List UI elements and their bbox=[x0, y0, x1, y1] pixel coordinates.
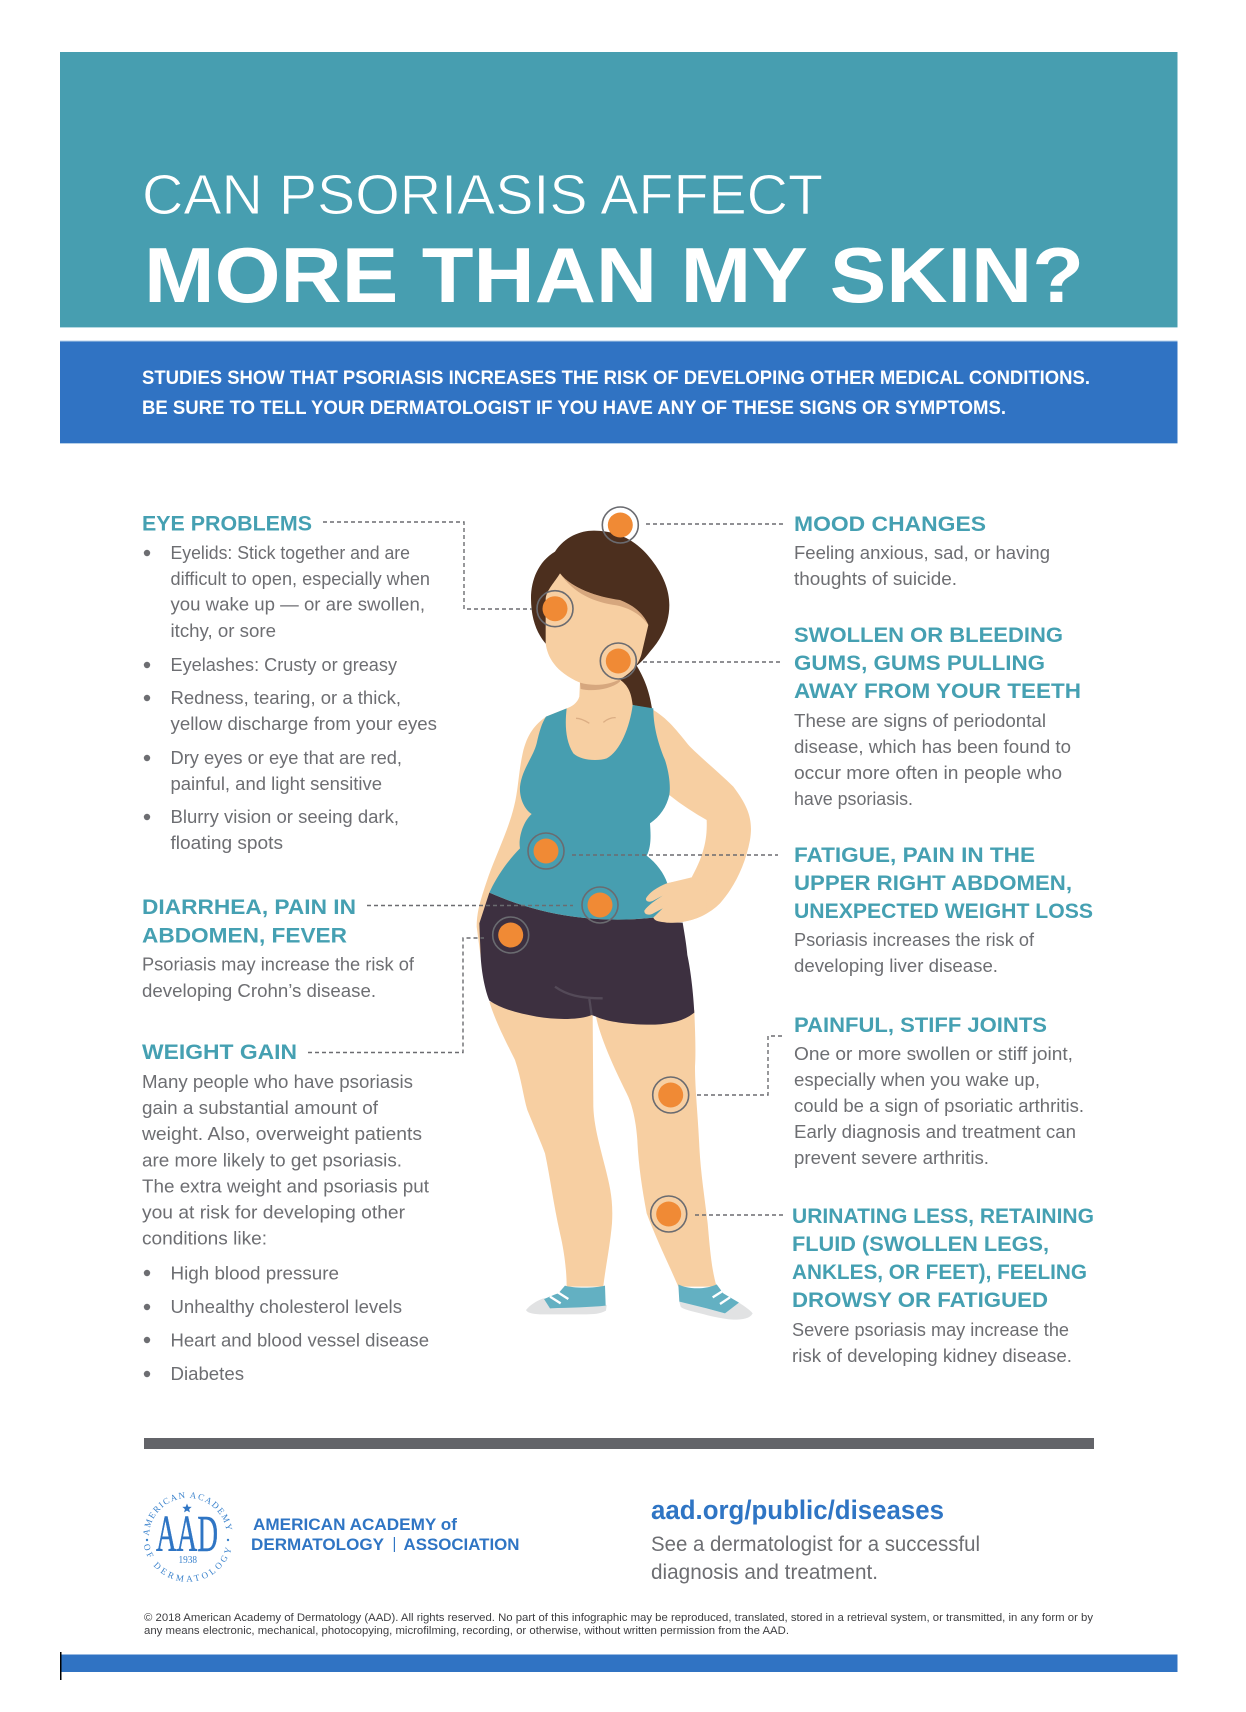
marker: joints bbox=[653, 1077, 689, 1113]
title line 1: CAN PSORIASIS AFFECT bbox=[142, 163, 823, 227]
connector: weight bbox=[308, 938, 484, 1052]
heading: diarrhea bbox=[142, 895, 356, 948]
text: weight gain: The extra weight and psoriasis put bbox=[142, 1176, 429, 1196]
copyright: any means electronic, mechanical, photocopying, microfilming, recording, or otherwise, without written permission from the AAD. bbox=[144, 1625, 789, 1637]
bullet list: eye problems: itchy, or sore bbox=[170, 620, 276, 641]
heading: kidney: ANKLES, OR FEET), FEELING bbox=[792, 1260, 1087, 1284]
left shoe bbox=[526, 1286, 607, 1314]
text: gums: disease, which has been found to bbox=[794, 736, 1071, 757]
bullet list: eye problems: Eyelashes: Crusty or greasy bbox=[170, 654, 398, 675]
left leg bbox=[489, 1002, 612, 1287]
text: joints: especially when you wake up, bbox=[794, 1069, 1040, 1090]
AAD seal logo: 1938 bbox=[178, 1555, 197, 1566]
organization name: ASSOCIATION bbox=[404, 1535, 520, 1554]
footer divider bbox=[144, 1438, 1094, 1449]
bottom bar bbox=[61, 1654, 1178, 1672]
marker: mood bbox=[602, 507, 638, 543]
figure of a woman bbox=[477, 531, 753, 1320]
bullet list: eye problems: Dry eyes or eye that are red, bbox=[170, 747, 402, 768]
AAD seal logo: AMERICAN ACADEMY bbox=[143, 1492, 232, 1536]
text: kidney: risk of developing kidney disease. bbox=[792, 1345, 1072, 1366]
marker: weight bbox=[493, 917, 529, 953]
connector: joints bbox=[697, 1036, 783, 1095]
hand bbox=[644, 877, 707, 923]
text: gums: These are signs of periodontal bbox=[794, 710, 1046, 731]
heading: kidney bbox=[792, 1204, 1094, 1312]
call to action bbox=[651, 1532, 980, 1584]
copyright bbox=[144, 1612, 1094, 1637]
heading: gums: GUMS, GUMS PULLING bbox=[794, 651, 1045, 675]
text: weight gain bbox=[141, 1071, 429, 1248]
bullet list: eye problems: Blurry vision or seeing dark, bbox=[170, 806, 399, 827]
gap between arm and waist bbox=[647, 795, 707, 883]
heading: liver bbox=[794, 843, 1093, 923]
text: joints bbox=[794, 1043, 1084, 1168]
marker: liver bbox=[528, 833, 564, 869]
text: weight gain: weight. Also, overweight patients bbox=[141, 1123, 422, 1144]
text: weight gain: Many people who have psoriasis bbox=[142, 1071, 413, 1092]
text: kidney bbox=[792, 1319, 1072, 1366]
neck shadow bbox=[580, 679, 620, 690]
AAD seal logo bbox=[143, 1492, 232, 1582]
shorts bbox=[479, 893, 694, 1025]
bullet list: weight gain: Diabetes bbox=[170, 1363, 244, 1384]
hair bbox=[531, 531, 669, 709]
heading: liver: UPPER RIGHT ABDOMEN, bbox=[794, 871, 1072, 895]
panel: mood changes bbox=[794, 512, 1050, 589]
text: liver bbox=[794, 929, 1035, 976]
bullet list: eye problems bbox=[144, 542, 437, 853]
heading: mood changes: MOOD CHANGES bbox=[794, 512, 986, 536]
heading: gums bbox=[794, 623, 1081, 703]
intro banner bbox=[60, 340, 1178, 444]
call to action: See a dermatologist for a successful bbox=[651, 1532, 980, 1556]
intro banner: BE SURE TO TELL YOUR DERMATOLOGIST IF YOU HAVE ANY OF THESE SIGNS OR SYMPTOMS. bbox=[142, 398, 1006, 419]
bullet list: eye problems: difficult to open, especially when bbox=[170, 568, 430, 589]
call to action: diagnosis and treatment. bbox=[651, 1560, 878, 1584]
right shoe bbox=[678, 1284, 753, 1320]
bullet list: weight gain: High blood pressure bbox=[170, 1262, 339, 1284]
panel: joints bbox=[794, 1013, 1084, 1168]
connector: diarrhea bbox=[367, 904, 573, 906]
text: joints: could be a sign of psoriatic arthritis. bbox=[794, 1095, 1084, 1116]
heading: liver: UNEXPECTED WEIGHT LOSS bbox=[794, 899, 1093, 923]
bullet list: eye problems: painful, and light sensitive bbox=[170, 773, 382, 794]
heading: joints: PAINFUL, STIFF JOINTS bbox=[794, 1013, 1047, 1037]
connector: kidney bbox=[695, 1214, 783, 1216]
organization name: DERMATOLOGY bbox=[251, 1535, 385, 1554]
text: diarrhea: Psoriasis may increase the risk of bbox=[142, 954, 415, 974]
heading: gums: AWAY FROM YOUR TEETH bbox=[794, 679, 1081, 703]
text: weight gain: conditions like: bbox=[142, 1228, 267, 1248]
bullet list: eye problems: yellow discharge from your eyes bbox=[170, 713, 437, 734]
text: kidney: Severe psoriasis may increase the bbox=[792, 1319, 1069, 1340]
panel: weight gain bbox=[141, 1040, 429, 1384]
hairline shadow bbox=[560, 573, 648, 625]
panel: liver bbox=[794, 843, 1093, 976]
marker: gums bbox=[600, 643, 636, 679]
heading: eye problems: EYE PROBLEMS bbox=[142, 512, 312, 536]
text: weight gain: you at risk for developing other bbox=[142, 1202, 405, 1222]
panel: gums bbox=[794, 623, 1081, 809]
AAD seal logo: OF DERMATOLOGY bbox=[144, 1544, 231, 1582]
AAD seal logo: AAD bbox=[156, 1506, 218, 1563]
bullet list: eye problems: floating spots bbox=[170, 832, 283, 853]
body skin bbox=[477, 680, 751, 957]
title banner bbox=[60, 52, 1178, 328]
text: mood changes: Feeling anxious, sad, or having bbox=[794, 542, 1050, 563]
heading: weight gain: WEIGHT GAIN bbox=[142, 1040, 297, 1064]
organization name bbox=[251, 1515, 520, 1554]
heading: liver: FATIGUE, PAIN IN THE bbox=[794, 843, 1035, 867]
text: liver: Psoriasis increases the risk of bbox=[794, 929, 1035, 950]
panel: kidney bbox=[792, 1204, 1094, 1366]
collarbones bbox=[576, 718, 616, 723]
text: gums bbox=[794, 710, 1071, 809]
bullet list: eye problems: Redness, tearing, or a thick, bbox=[170, 687, 401, 708]
panel: diarrhea bbox=[142, 895, 415, 1001]
marker: kidney bbox=[651, 1196, 687, 1232]
right leg bbox=[596, 1010, 717, 1287]
text: gums: occur more often in people who bbox=[794, 762, 1062, 783]
cursor mark bbox=[60, 1652, 62, 1680]
organization name: AMERICAN ACADEMY of bbox=[253, 1515, 457, 1534]
bullet list: weight gain bbox=[144, 1262, 429, 1384]
bullet list: eye problems: you wake up — or are swollen, bbox=[170, 594, 425, 614]
connector: liver bbox=[572, 854, 778, 856]
panel: eye problems bbox=[142, 512, 437, 853]
text: mood changes bbox=[794, 542, 1050, 589]
heading: gums: SWOLLEN OR BLEEDING bbox=[794, 623, 1063, 647]
connector: eye problems bbox=[323, 522, 532, 609]
copyright: © 2018 American Academy of Dermatology (AAD). All rights reserved. No part of this infographic may be reproduced, translated, stored in a retrieval system, or transmitted, in any form or by bbox=[144, 1612, 1094, 1624]
website link: aad.org/public/diseases bbox=[651, 1495, 944, 1525]
connector: gums bbox=[643, 661, 783, 663]
marker: abdomen bbox=[582, 887, 618, 923]
text: joints: Early diagnosis and treatment can bbox=[794, 1121, 1076, 1142]
marker: eye bbox=[537, 591, 573, 627]
text: weight gain: are more likely to get psoriasis. bbox=[142, 1150, 402, 1170]
heading: diarrhea: ABDOMEN, FEVER bbox=[142, 924, 347, 948]
bullet list: weight gain: Unhealthy cholesterol levels bbox=[170, 1296, 402, 1317]
heading: kidney: URINATING LESS, RETAINING bbox=[792, 1204, 1094, 1228]
text: joints: prevent severe arthritis. bbox=[794, 1147, 989, 1168]
bullet list: eye problems: Eyelids: Stick together and are bbox=[170, 542, 410, 563]
connector: mood bbox=[646, 523, 783, 525]
heading: kidney: FLUID (SWOLLEN LEGS, bbox=[792, 1232, 1049, 1256]
text: gums: have psoriasis. bbox=[794, 788, 913, 809]
bullet list: weight gain: Heart and blood vessel disease bbox=[170, 1330, 429, 1350]
text: diarrhea: developing Crohn’s disease. bbox=[142, 980, 376, 1001]
text: liver: developing liver disease. bbox=[794, 955, 998, 976]
text: diarrhea bbox=[142, 954, 415, 1001]
heading: kidney: DROWSY OR FATIGUED bbox=[792, 1288, 1048, 1312]
text: weight gain: gain a substantial amount of bbox=[142, 1097, 379, 1118]
title line 2: MORE THAN MY SKIN? bbox=[144, 231, 1084, 319]
tank top bbox=[489, 705, 670, 920]
text: joints: One or more swollen or stiff joint, bbox=[794, 1043, 1073, 1064]
intro banner: STUDIES SHOW THAT PSORIASIS INCREASES THE RISK OF DEVELOPING OTHER MEDICAL CONDITIONS. bbox=[142, 368, 1090, 389]
heading: diarrhea: DIARRHEA, PAIN IN bbox=[142, 895, 356, 919]
text: mood changes: thoughts of suicide. bbox=[794, 568, 957, 589]
face bbox=[546, 573, 648, 685]
